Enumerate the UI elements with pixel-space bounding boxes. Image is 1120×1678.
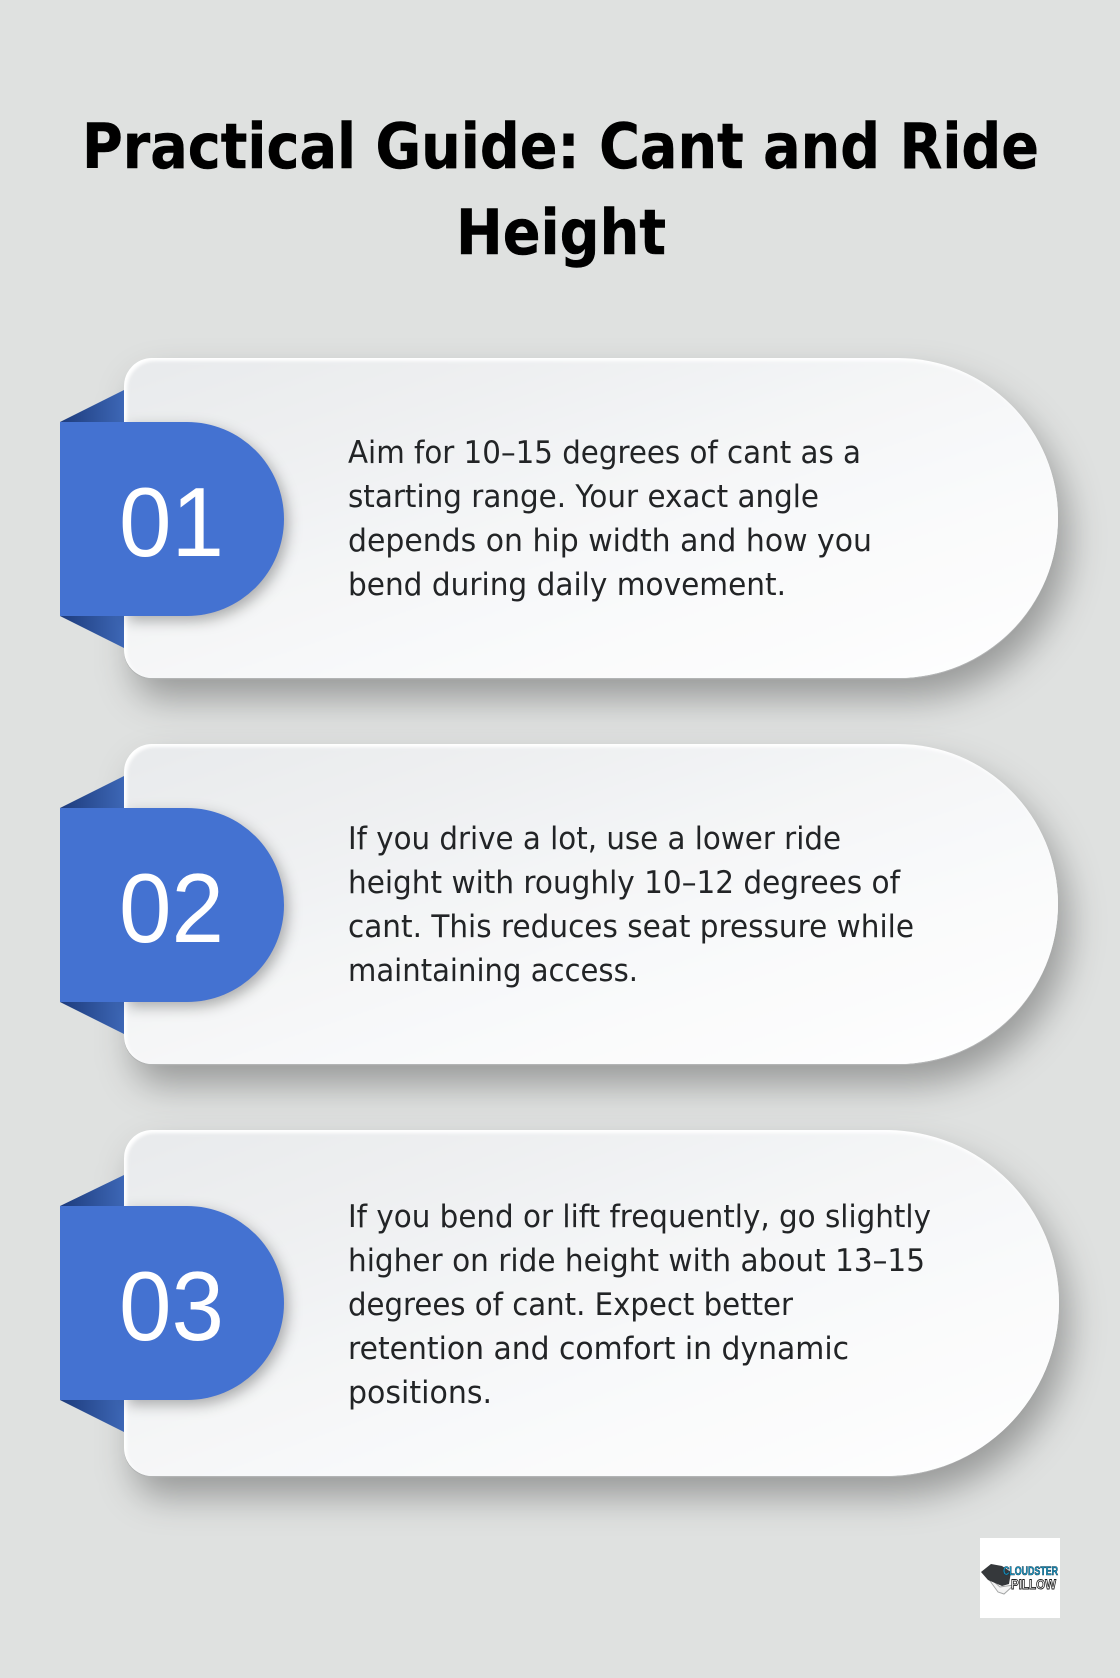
tab shadow 03 bbox=[128, 1211, 288, 1405]
text 03: If you bend or lift frequently, go slightly bbox=[348, 1199, 931, 1235]
text 02 bbox=[348, 821, 914, 989]
panel: step 03 bbox=[60, 1126, 1068, 1496]
card edge 02 bbox=[124, 745, 1058, 1065]
number tab 03 bbox=[60, 1206, 284, 1400]
card shadow 02 bbox=[134, 764, 1068, 1084]
card shadow 01 bbox=[134, 378, 1068, 698]
text 01: Aim for 10–15 degrees of cant as a bbox=[348, 435, 861, 471]
card 01 bbox=[120, 354, 1065, 684]
logo wordmark: PILLOW bbox=[1011, 1576, 1057, 1592]
logo wordmark bbox=[1003, 1564, 1058, 1592]
logo wordmark: CLOUDSTER bbox=[1003, 1564, 1058, 1578]
panel: step 02 bbox=[60, 740, 1068, 1084]
panel: step 01 bbox=[60, 354, 1068, 698]
number 03: 03 bbox=[119, 1251, 224, 1361]
card shadow 03 bbox=[134, 1150, 1068, 1496]
fold top 02 bbox=[60, 776, 124, 808]
fold bottom 01 bbox=[60, 616, 124, 648]
text 01: starting range. Your exact angle bbox=[348, 479, 819, 515]
number tab 02 bbox=[60, 808, 284, 1002]
card edge 03 bbox=[124, 1131, 1058, 1477]
text 01: depends on hip width and how you bbox=[348, 523, 872, 559]
tab shadow 02 bbox=[128, 813, 288, 1007]
fold bottom 03 bbox=[60, 1400, 124, 1432]
fold top 03 bbox=[60, 1175, 124, 1206]
text 01: bend during daily movement. bbox=[348, 567, 786, 603]
card 03 bbox=[120, 1126, 1065, 1482]
text 03 bbox=[348, 1199, 931, 1411]
text 03: retention and comfort in dynamic bbox=[348, 1331, 849, 1367]
text 03: degrees of cant. Expect better bbox=[348, 1287, 793, 1323]
title: Height bbox=[456, 196, 666, 269]
logo background bbox=[980, 1538, 1060, 1618]
card edge 01 bbox=[124, 359, 1058, 679]
text 02: maintaining access. bbox=[348, 953, 638, 989]
text 03: higher on ride height with about 13–15 bbox=[348, 1243, 925, 1279]
text 02: cant. This reduces seat pressure while bbox=[348, 909, 914, 945]
text 02: If you drive a lot, use a lower ride bbox=[348, 821, 841, 857]
text 03: positions. bbox=[348, 1375, 492, 1411]
title bbox=[82, 110, 1039, 269]
logo bbox=[980, 1538, 1060, 1618]
number 01: 01 bbox=[119, 467, 224, 577]
fold top 01 bbox=[60, 390, 124, 422]
fold bottom 02 bbox=[60, 1002, 124, 1034]
text 01 bbox=[348, 435, 872, 603]
title: Practical Guide: Cant and Ride bbox=[82, 110, 1039, 183]
text 02: height with roughly 10–12 degrees of bbox=[348, 865, 901, 901]
card 02 bbox=[120, 740, 1065, 1070]
logo pillow icon bbox=[981, 1564, 1014, 1594]
tab shadow 01 bbox=[128, 427, 288, 621]
number 02: 02 bbox=[119, 853, 224, 963]
number tab 01 bbox=[60, 422, 284, 616]
